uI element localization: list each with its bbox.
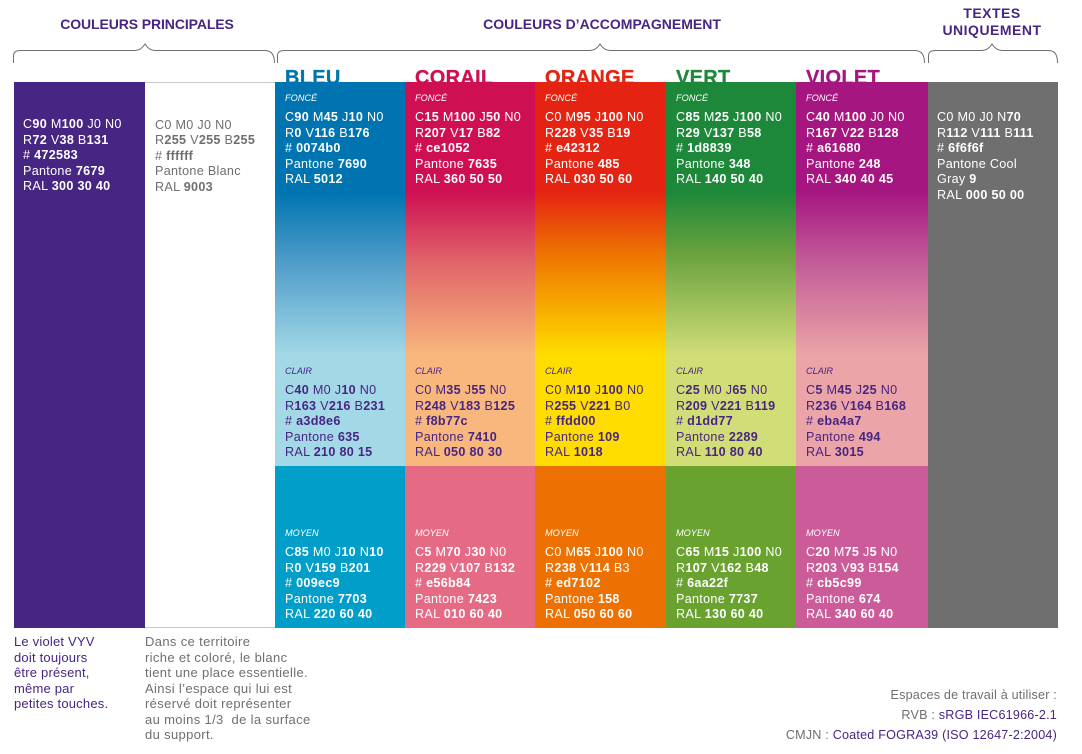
panel: gris bbox=[928, 82, 1058, 628]
values: vert clair: Pantone 2289 bbox=[676, 430, 758, 444]
values: gris: RAL 000 50 00 bbox=[937, 188, 1024, 202]
values: bleu clair: Pantone 635 bbox=[285, 430, 360, 444]
note: violet VYV: même par bbox=[14, 680, 74, 696]
values: violet clair: R236 V164 B168 bbox=[806, 398, 906, 412]
heading: couleurs d'accompagnement: COULEURS D’ACCOMPAGNEMENT bbox=[483, 16, 721, 32]
values: orange moyen: RAL 050 60 60 bbox=[545, 607, 632, 621]
values: gris: Gray 9 bbox=[937, 172, 977, 186]
values: bleu foncé: C90 M45 J10 N0 bbox=[285, 110, 384, 124]
label: clair: CLAIR bbox=[415, 366, 442, 376]
values: bleu clair: C40 M0 J10 N0 bbox=[285, 383, 376, 397]
values: vert foncé bbox=[676, 110, 782, 186]
values: bleu foncé bbox=[285, 110, 384, 186]
label: foncé: FONCÉ bbox=[415, 93, 447, 103]
values: vert foncé: C85 M25 J100 N0 bbox=[676, 110, 782, 124]
values: violet moyen: Pantone 674 bbox=[806, 592, 881, 606]
values: vert moyen: R107 V162 B48 bbox=[676, 560, 769, 574]
values: blanc: Pantone Blanc bbox=[155, 164, 241, 178]
note: blanc: tient une place essentielle. bbox=[145, 665, 308, 680]
values: vert foncé: RAL 140 50 40 bbox=[676, 172, 763, 186]
values: bleu moyen: RAL 220 60 40 bbox=[285, 607, 372, 621]
values: violet moyen: C20 M75 J5 N0 bbox=[806, 545, 897, 559]
values: violet clair: C5 M45 J25 N0 bbox=[806, 383, 897, 397]
values: vert clair bbox=[676, 383, 775, 459]
note: espaces de travail: CMJN : Coated FOGRA39 (ISO 12647-2:2004) bbox=[786, 728, 1057, 742]
values: vert moyen bbox=[676, 545, 782, 621]
label: foncé: FONCÉ bbox=[806, 93, 838, 103]
heading: couleurs principales: COULEURS PRINCIPALES bbox=[60, 16, 234, 32]
values: orange moyen: R238 V114 B3 bbox=[545, 560, 630, 574]
values: orange foncé: R228 V35 B19 bbox=[545, 126, 631, 140]
values: corail clair: RAL 050 80 30 bbox=[415, 445, 502, 459]
values: orange moyen: # ed7102 bbox=[545, 576, 601, 590]
values: bleu moyen: R0 V159 B201 bbox=[285, 560, 371, 574]
values: orange moyen bbox=[545, 545, 644, 621]
values: blanc: # ffffff bbox=[155, 148, 193, 162]
values: vert clair: # d1dd77 bbox=[676, 414, 733, 428]
values: violet clair: # eba4a7 bbox=[806, 414, 862, 428]
panel: orange bbox=[535, 82, 666, 628]
values: corail moyen bbox=[415, 545, 515, 621]
heading: textes uniquement: TEXTES bbox=[963, 5, 1021, 21]
values: blanc bbox=[155, 118, 255, 194]
note: espaces de travail bbox=[786, 688, 1057, 742]
values: violet bbox=[23, 117, 122, 193]
values: orange clair bbox=[545, 383, 644, 459]
values: gris bbox=[937, 110, 1034, 202]
values: gris: R112 V111 B111 bbox=[937, 126, 1034, 140]
values: vert clair: C25 M0 J65 N0 bbox=[676, 383, 767, 397]
values: corail clair: R248 V183 B125 bbox=[415, 398, 515, 412]
note: blanc: Dans ce territoire bbox=[145, 634, 250, 649]
values: violet clair: Pantone 494 bbox=[806, 430, 881, 444]
note: blanc: au moins 1/3 de la surface bbox=[145, 712, 311, 726]
values: corail clair bbox=[415, 383, 515, 459]
note: blanc: riche et coloré, le blanc bbox=[145, 650, 287, 664]
panel: corail bbox=[405, 82, 535, 628]
values: blanc: R255 V255 B255 bbox=[155, 133, 255, 147]
values: violet moyen bbox=[806, 545, 899, 621]
values: orange clair: Pantone 109 bbox=[545, 430, 620, 444]
values: violet moyen: R203 V93 B154 bbox=[806, 560, 899, 574]
values: violet foncé bbox=[806, 110, 905, 186]
values: orange foncé: # e42312 bbox=[545, 141, 600, 155]
note: blanc bbox=[145, 634, 311, 742]
values: violet: RAL 300 30 40 bbox=[23, 179, 110, 193]
values: blanc: C0 M0 J0 N0 bbox=[155, 118, 232, 132]
values: bleu moyen bbox=[285, 545, 384, 621]
label: moyen: MOYEN bbox=[545, 528, 579, 538]
values: orange foncé bbox=[545, 110, 644, 186]
values: orange clair: # ffdd00 bbox=[545, 414, 596, 428]
values: orange moyen: Pantone 158 bbox=[545, 592, 620, 606]
label: foncé: FONCÉ bbox=[545, 93, 577, 103]
values: bleu clair: R163 V216 B231 bbox=[285, 398, 385, 412]
values: bleu moyen: C85 M0 J10 N10 bbox=[285, 545, 384, 559]
values: blanc: RAL 9003 bbox=[155, 180, 213, 194]
panel: violet accompagnement bbox=[796, 82, 928, 628]
values: vert clair: RAL 110 80 40 bbox=[676, 445, 763, 459]
values: corail foncé: C15 M100 J50 N0 bbox=[415, 110, 521, 124]
label: foncé: FONCÉ bbox=[676, 93, 708, 103]
panel: vert bbox=[666, 82, 796, 628]
heading: textes uniquement: UNIQUEMENT bbox=[942, 22, 1042, 38]
note: violet VYV: Le violet VYV bbox=[14, 634, 95, 649]
values: violet: C90 M100 J0 N0 bbox=[23, 117, 122, 131]
label: clair: CLAIR bbox=[806, 366, 833, 376]
heading: textes uniquement bbox=[942, 5, 1042, 38]
note: blanc: du support. bbox=[145, 727, 214, 742]
values: violet moyen: # cb5c99 bbox=[806, 576, 862, 590]
label: clair: CLAIR bbox=[285, 366, 312, 376]
values: corail foncé bbox=[415, 110, 521, 186]
label: moyen: MOYEN bbox=[806, 528, 840, 538]
label: moyen: MOYEN bbox=[415, 528, 449, 538]
values: corail clair: # f8b77c bbox=[415, 414, 468, 428]
values: corail clair: C0 M35 J55 N0 bbox=[415, 383, 506, 397]
values: vert foncé: # 1d8839 bbox=[676, 141, 732, 155]
note: violet VYV: petites touches. bbox=[14, 696, 108, 711]
values: corail foncé: # ce1052 bbox=[415, 141, 470, 155]
values: orange clair: RAL 1018 bbox=[545, 445, 603, 459]
values: bleu foncé: Pantone 7690 bbox=[285, 156, 367, 170]
values: vert moyen: C65 M15 J100 N0 bbox=[676, 545, 782, 559]
values: bleu foncé: R0 V116 B176 bbox=[285, 126, 370, 140]
panel: violet principal bbox=[14, 82, 145, 628]
values: vert foncé: Pantone 348 bbox=[676, 156, 751, 170]
note: violet VYV: être présent, bbox=[14, 665, 90, 680]
values: orange foncé: RAL 030 50 60 bbox=[545, 172, 632, 186]
values: violet moyen: RAL 340 60 40 bbox=[806, 607, 893, 621]
label: clair: CLAIR bbox=[545, 366, 572, 376]
values: corail foncé: R207 V17 B82 bbox=[415, 126, 501, 140]
values: violet: R72 V38 B131 bbox=[23, 132, 109, 146]
values: violet: # 472583 bbox=[23, 148, 78, 162]
values: violet foncé: C40 M100 J0 N0 bbox=[806, 110, 905, 124]
values: violet clair bbox=[806, 383, 906, 459]
values: violet foncé: # a61680 bbox=[806, 141, 861, 155]
note: espaces de travail: RVB : sRGB IEC61966-2.1 bbox=[901, 708, 1057, 722]
values: orange foncé: C0 M95 J100 N0 bbox=[545, 110, 644, 124]
values: orange clair: R255 V221 B0 bbox=[545, 398, 631, 412]
values: bleu clair: RAL 210 80 15 bbox=[285, 445, 372, 459]
values: gris: # 6f6f6f bbox=[937, 141, 984, 155]
values: vert moyen: # 6aa22f bbox=[676, 576, 728, 590]
values: bleu moyen: # 009ec9 bbox=[285, 576, 340, 590]
values: corail clair: Pantone 7410 bbox=[415, 430, 497, 444]
values: corail moyen: # e56b84 bbox=[415, 576, 471, 590]
note: espaces de travail: Espaces de travail à utiliser : bbox=[890, 688, 1057, 702]
label: clair: CLAIR bbox=[676, 366, 703, 376]
panel: bleu bbox=[275, 82, 405, 628]
values: violet foncé: Pantone 248 bbox=[806, 156, 881, 170]
values: bleu clair: # a3d8e6 bbox=[285, 414, 341, 428]
values: orange foncé: Pantone 485 bbox=[545, 156, 620, 170]
values: violet clair: RAL 3015 bbox=[806, 445, 864, 459]
values: corail moyen: C5 M70 J30 N0 bbox=[415, 545, 506, 559]
braces above the columns bbox=[13, 43, 1058, 63]
label: moyen: MOYEN bbox=[676, 528, 710, 538]
values: corail foncé: Pantone 7635 bbox=[415, 156, 497, 170]
note: blanc: réservé doit représenter bbox=[145, 696, 291, 711]
values: bleu foncé: # 0074b0 bbox=[285, 141, 341, 155]
values: gris: C0 M0 J0 N70 bbox=[937, 110, 1021, 124]
values: violet: Pantone 7679 bbox=[23, 164, 105, 178]
values: vert moyen: Pantone 7737 bbox=[676, 592, 758, 606]
values: bleu clair bbox=[285, 383, 385, 459]
note: blanc: Ainsi l’espace qui lui est bbox=[145, 680, 292, 696]
values: bleu foncé: RAL 5012 bbox=[285, 172, 343, 186]
note: violet VYV: doit toujours bbox=[14, 650, 87, 664]
label: moyen: MOYEN bbox=[285, 528, 319, 538]
values: vert moyen: RAL 130 60 40 bbox=[676, 607, 763, 621]
note: violet VYV bbox=[14, 634, 108, 711]
panel: blanc bbox=[145, 82, 275, 628]
values: corail moyen: RAL 010 60 40 bbox=[415, 607, 502, 621]
values: violet foncé: RAL 340 40 45 bbox=[806, 172, 893, 186]
values: violet foncé: R167 V22 B128 bbox=[806, 126, 899, 140]
values: corail foncé: RAL 360 50 50 bbox=[415, 172, 502, 186]
values: gris: Pantone Cool bbox=[937, 156, 1017, 170]
label: foncé: FONCÉ bbox=[285, 93, 317, 103]
values: corail moyen: R229 V107 B132 bbox=[415, 560, 515, 574]
values: bleu moyen: Pantone 7703 bbox=[285, 592, 367, 606]
values: orange clair: C0 M10 J100 N0 bbox=[545, 383, 644, 397]
values: vert foncé: R29 V137 B58 bbox=[676, 126, 762, 140]
values: corail moyen: Pantone 7423 bbox=[415, 592, 497, 606]
values: orange moyen: C0 M65 J100 N0 bbox=[545, 545, 644, 559]
values: vert clair: R209 V221 B119 bbox=[676, 398, 775, 412]
